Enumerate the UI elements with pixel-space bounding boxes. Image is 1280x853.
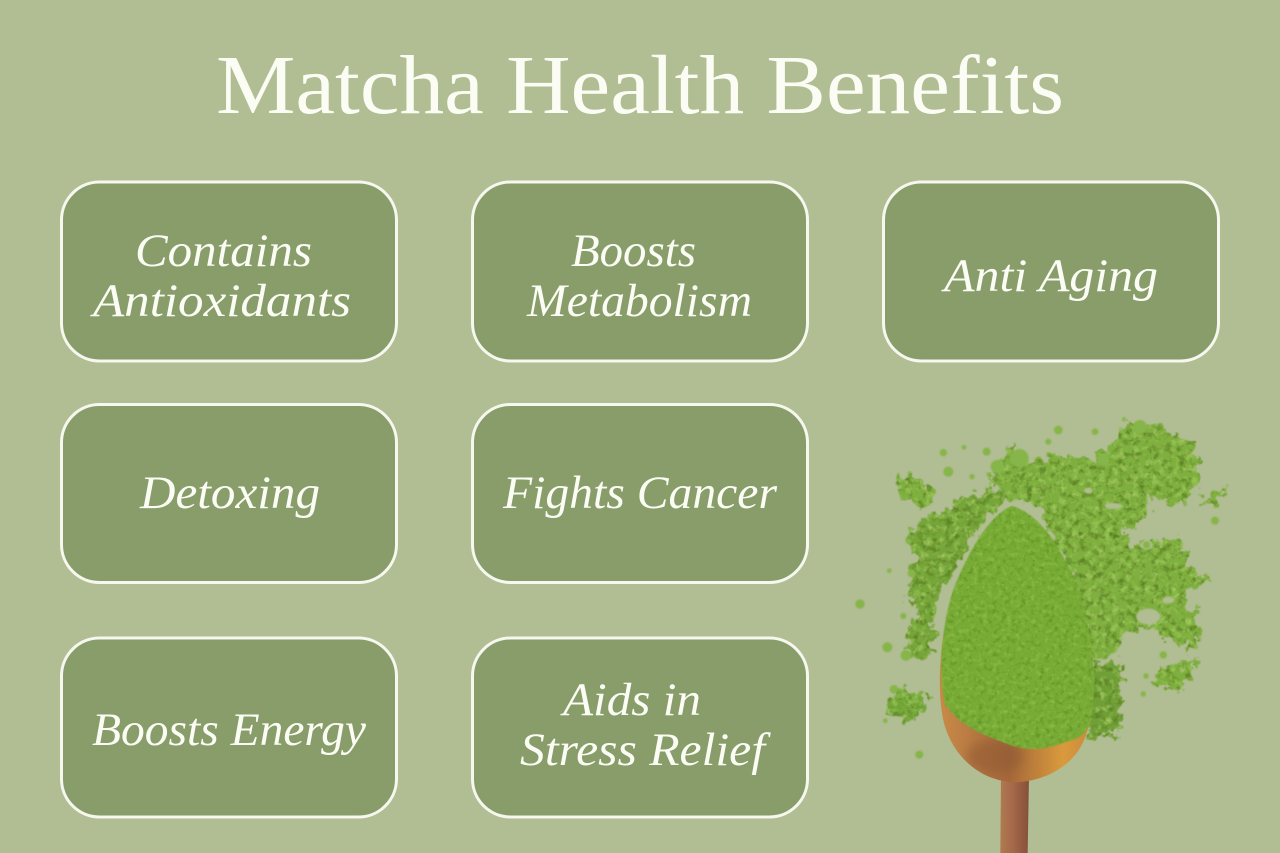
powder crumbs	[855, 420, 1219, 759]
panel text: Boosts Energy	[92, 704, 366, 756]
spoon handle	[1000, 777, 1029, 853]
panel: boosts energy	[62, 638, 396, 817]
panel box	[62, 182, 396, 361]
panel text: Anti Aging	[941, 250, 1158, 302]
panel text: Aids in	[560, 674, 701, 726]
panel text: Metabolism	[526, 275, 752, 327]
panel box	[472, 182, 808, 361]
panel text: Fights Cancer	[502, 467, 778, 519]
panel: boosts metabolism	[472, 182, 808, 361]
panel: fights cancer	[472, 404, 808, 582]
panel box	[884, 182, 1218, 361]
panel box	[472, 404, 808, 582]
panel box	[62, 638, 396, 817]
panel text: Detoxing	[139, 467, 320, 519]
panel: contains antioxidants	[62, 182, 396, 361]
panel box	[472, 638, 808, 817]
scattered powder	[889, 419, 1230, 737]
panel text: Stress Relief	[520, 724, 771, 776]
panel text: Contains	[135, 225, 312, 277]
panel: aids in stress relief	[472, 638, 808, 817]
dark wood tone at bowl base	[967, 740, 1023, 773]
panel box	[62, 404, 396, 582]
dense powder behind spoon	[919, 495, 1135, 655]
panel: anti aging	[884, 182, 1218, 361]
illustration: wooden spoon with matcha powder	[855, 419, 1230, 853]
powder gaps	[1084, 488, 1174, 625]
title: Matcha Health Benefits	[216, 39, 1064, 132]
panel text: Antioxidants	[90, 275, 351, 327]
powder in bowl	[941, 506, 1094, 749]
panel text: Boosts	[571, 225, 696, 277]
spoon bowl	[940, 507, 1093, 782]
panel: detoxing	[62, 404, 396, 582]
